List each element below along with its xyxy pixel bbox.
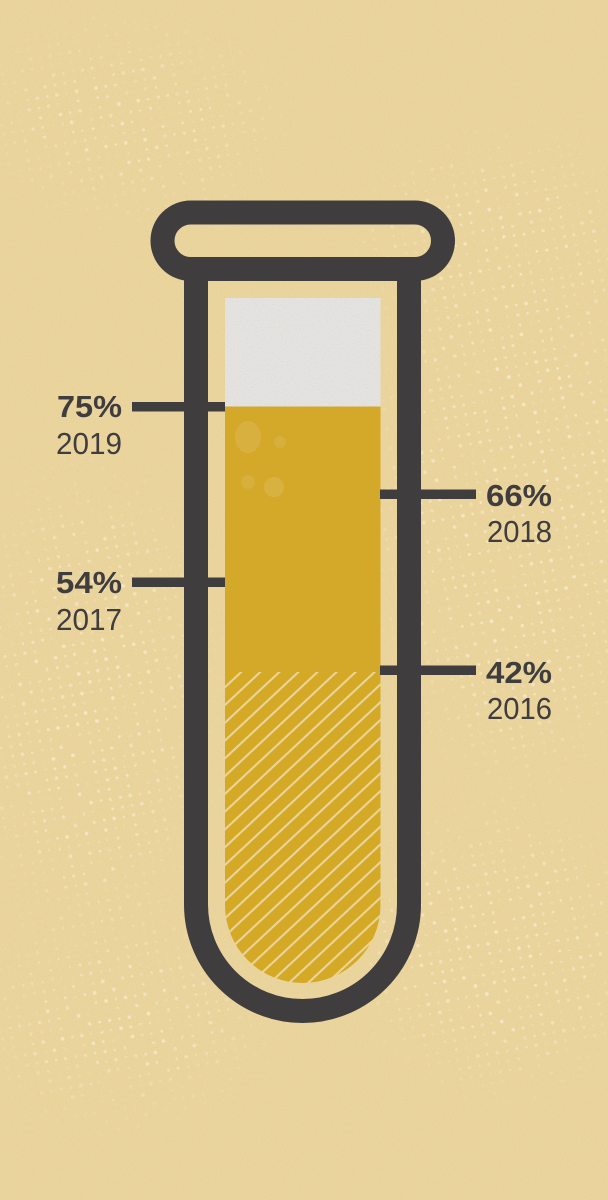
label: 75% 2019: 2019 (56, 426, 122, 461)
liquid: empty white section (225, 298, 380, 407)
label: 75% 2019: 75% (57, 389, 122, 424)
label: 54% 2017: 2017 (56, 602, 122, 637)
label: 66% 2018 (486, 478, 552, 549)
label: 54% 2017: 54% (56, 565, 122, 600)
test tube outline (162, 212, 443, 1011)
label: 42% 2016: 2016 (487, 691, 552, 726)
label: 54% 2017 (56, 565, 122, 637)
label: 66% 2018: 2018 (487, 514, 552, 549)
label: 66% 2018: 66% (486, 478, 552, 513)
marker line: 2016 (380, 666, 476, 675)
marker line: 2017 (132, 578, 225, 587)
marker line: 2018 (380, 490, 476, 499)
liquid: hatched section (225, 672, 380, 984)
liquid: solid gold section (225, 406, 380, 672)
label: 42% 2016 (486, 655, 552, 726)
label: 42% 2016: 42% (486, 655, 552, 690)
icon: bubbles (235, 421, 286, 497)
label: 75% 2019 (56, 389, 122, 461)
marker line: 2019 (132, 402, 225, 412)
